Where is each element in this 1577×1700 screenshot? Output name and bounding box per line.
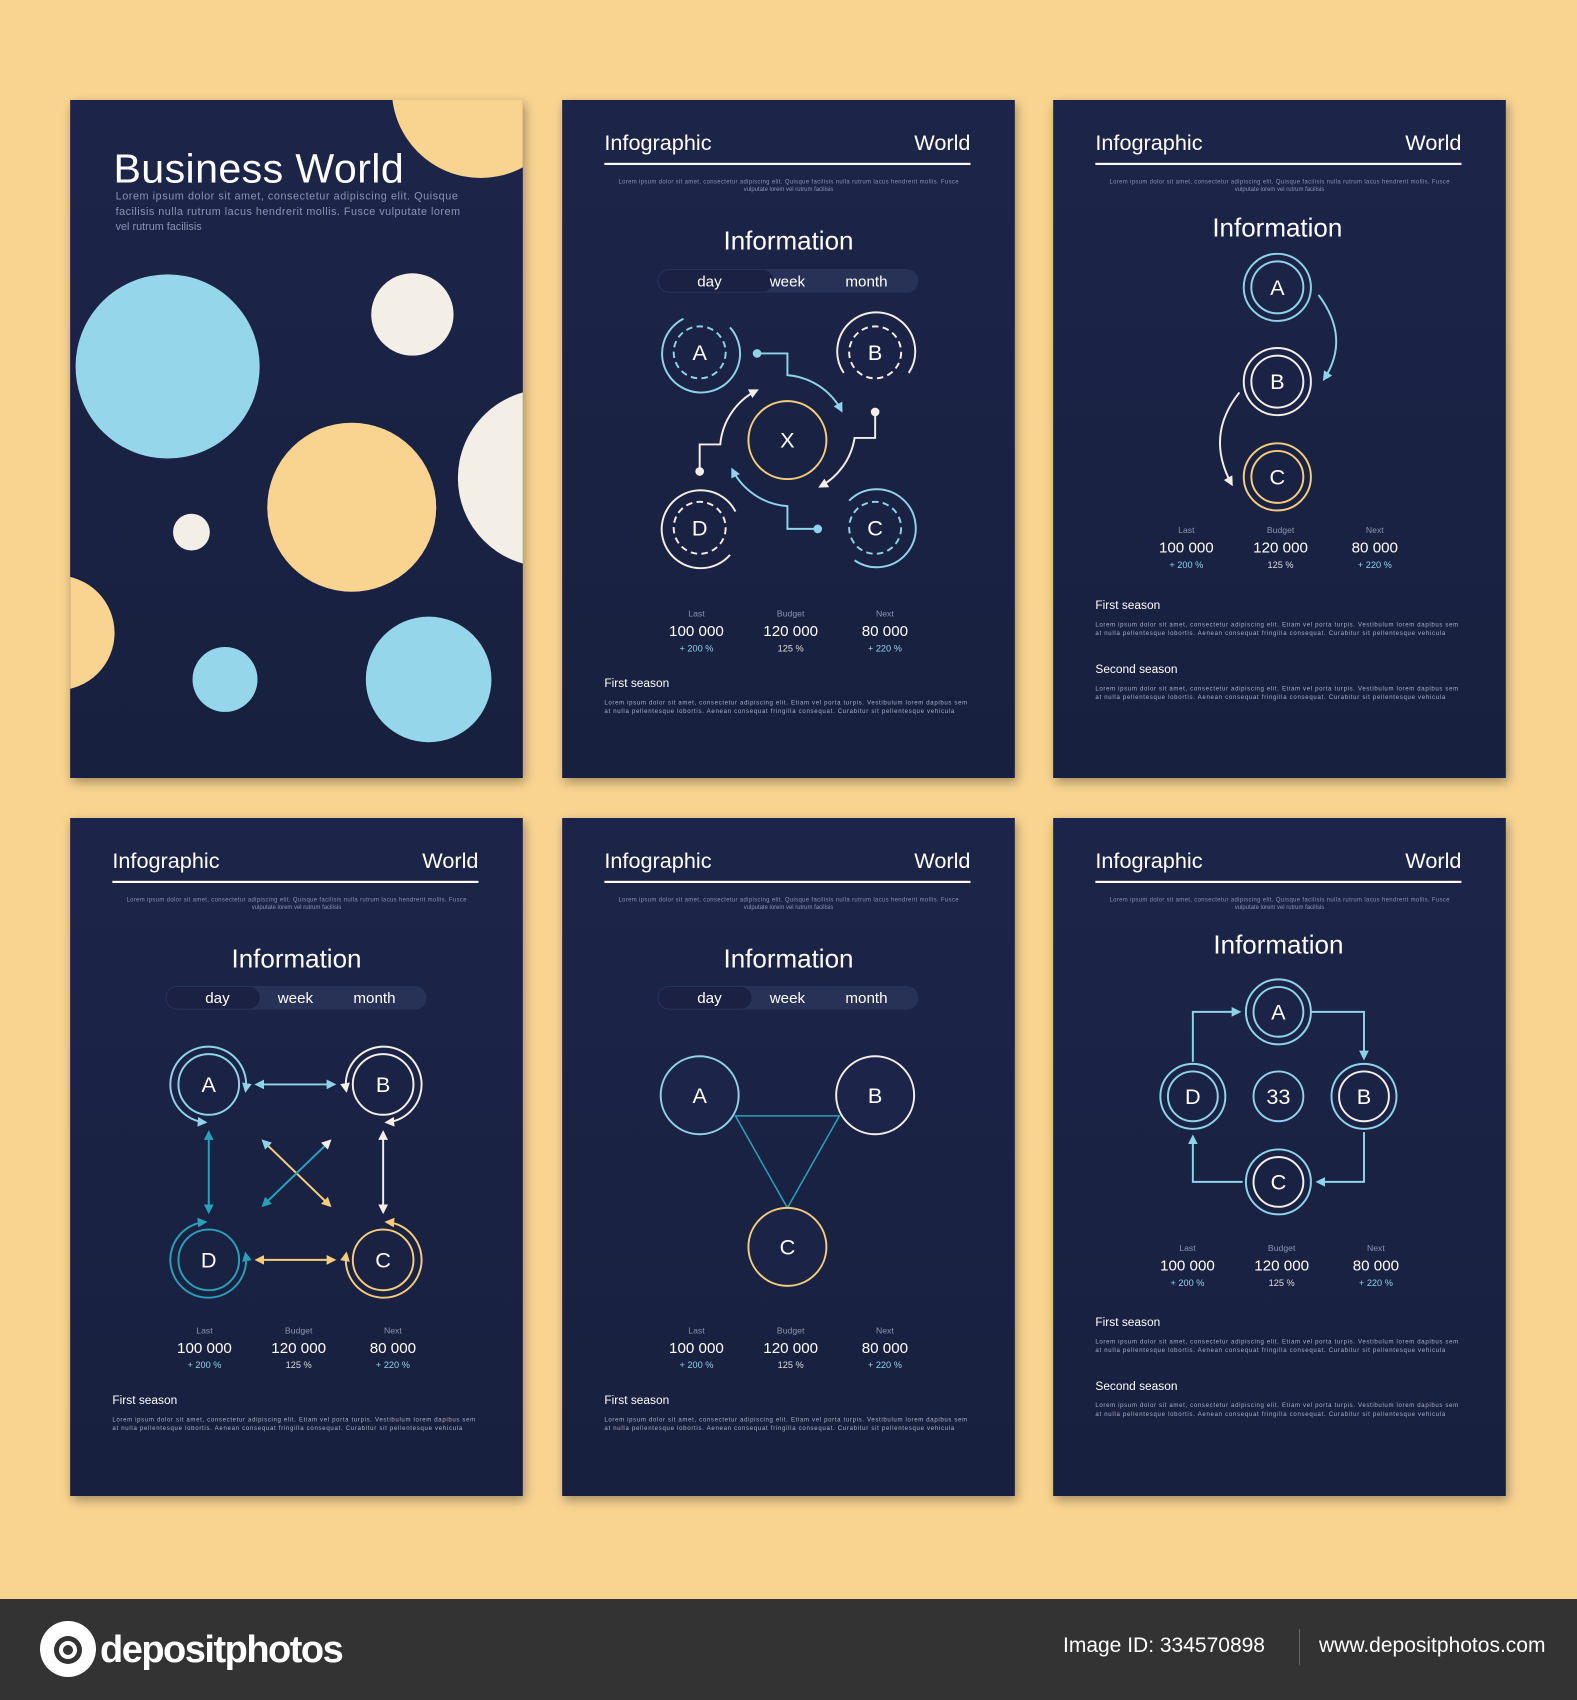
heading: Information xyxy=(232,943,362,973)
stats: Budget xyxy=(777,609,805,619)
diagram xyxy=(1220,254,1336,510)
panel: infographic X cycle: A xyxy=(692,340,707,365)
stats: + 220 % xyxy=(1359,1278,1393,1288)
header: World xyxy=(914,848,970,873)
panel: ABCD cycle 33: C xyxy=(1271,1169,1286,1194)
heading: Information xyxy=(724,943,854,973)
panel: vertical ABC: vulputate lorem vel rutrum facilisis xyxy=(1235,187,1324,193)
seasons: at nulla pellentesque lobortis. Aenean consequat fringilla consequat. Curabitur sit pellentesque vehicula xyxy=(1095,1348,1446,1354)
stats: Last xyxy=(196,1326,213,1336)
seasons: First season xyxy=(1095,598,1160,612)
panel: ABCD arrows: D xyxy=(201,1247,217,1272)
stats: 80 000 xyxy=(1353,1258,1399,1275)
tabs: month xyxy=(353,990,396,1007)
tabs: month xyxy=(845,990,888,1007)
stats: + 220 % xyxy=(376,1360,410,1370)
stats: Next xyxy=(384,1326,402,1336)
stats xyxy=(177,1326,416,1370)
header: World xyxy=(422,848,478,873)
tabs xyxy=(657,986,918,1010)
stats: Last xyxy=(688,1326,705,1336)
title: Business World xyxy=(113,145,404,191)
stats: 100 000 xyxy=(669,623,724,640)
seasons: at nulla pellentesque lobortis. Aenean consequat fringilla consequat. Curabitur sit pellentesque vehicula xyxy=(1095,695,1446,701)
icon: camera xyxy=(40,1621,96,1677)
logo xyxy=(40,1621,343,1677)
stats: + 200 % xyxy=(679,1360,713,1370)
stats: + 200 % xyxy=(1170,1278,1204,1288)
stats: 125 % xyxy=(778,643,804,653)
stats: 125 % xyxy=(1269,1278,1295,1288)
panel: vertical ABC: A xyxy=(1270,275,1285,300)
stats: 125 % xyxy=(286,1360,312,1370)
stats: Next xyxy=(1367,1243,1385,1253)
seasons xyxy=(1095,1315,1458,1418)
stats: Next xyxy=(1366,525,1384,535)
stats: 80 000 xyxy=(370,1340,416,1357)
stats xyxy=(1159,525,1398,570)
header xyxy=(1095,848,1461,883)
stats: 80 000 xyxy=(862,1340,908,1357)
first season xyxy=(604,676,967,715)
stats xyxy=(669,1326,908,1370)
panel: triangle ABC xyxy=(562,818,1015,1496)
panel: triangle ABC: C xyxy=(780,1234,795,1259)
panel: infographic X cycle xyxy=(562,100,1015,778)
panel: ABCD arrows: C xyxy=(375,1247,391,1272)
seasons: at nulla pellentesque lobortis. Aenean consequat fringilla consequat. Curabitur sit pellentesque vehicula xyxy=(1095,631,1446,637)
logo: depositphotos xyxy=(100,1629,343,1671)
first season: Lorem ipsum dolor sit amet, consectetur adipiscing elit. Etiam vel porta turpis. Vestibulum lorem dapibus sem xyxy=(604,700,967,706)
tabs xyxy=(657,269,918,293)
stats: + 220 % xyxy=(868,643,902,653)
first season: at nulla pellentesque lobortis. Aenean consequat fringilla consequat. Curabitur sit pellentesque vehicula xyxy=(604,709,955,715)
panel: ABCD cycle 33: B xyxy=(1357,1084,1371,1109)
heading: Information xyxy=(1212,212,1342,242)
stats: 100 000 xyxy=(1159,540,1214,557)
heading: Information xyxy=(724,225,854,255)
diagram xyxy=(1160,979,1396,1214)
stats xyxy=(669,609,908,653)
header: Infographic xyxy=(1095,848,1203,873)
tabs: day xyxy=(697,273,722,290)
heading: Information xyxy=(1213,929,1343,959)
stats: 100 000 xyxy=(177,1340,232,1357)
stats: 125 % xyxy=(1268,560,1294,570)
seasons: Lorem ipsum dolor sit amet, consectetur adipiscing elit. Etiam vel porta turpis. Vestibulum lorem dapibus sem xyxy=(1095,686,1458,692)
footer bar xyxy=(0,1599,1577,1700)
stats: Last xyxy=(688,609,705,619)
tabs: week xyxy=(769,990,806,1007)
panel: triangle ABC: Lorem ipsum dolor sit amet, consectetur adipiscing elit. Quisque facilisis nulla rutrum lacus hendrerit mollis. Fusce xyxy=(618,897,959,903)
stats: 80 000 xyxy=(862,623,908,640)
header: World xyxy=(1405,130,1461,155)
stats: 120 000 xyxy=(1253,540,1308,557)
stats: Budget xyxy=(285,1326,313,1336)
tabs: week xyxy=(769,273,806,290)
seasons: Lorem ipsum dolor sit amet, consectetur adipiscing elit. Etiam vel porta turpis. Vestibulum lorem dapibus sem xyxy=(1095,622,1458,628)
stats xyxy=(1160,1243,1399,1288)
panel: triangle ABC: A xyxy=(692,1083,707,1108)
first season: First season xyxy=(112,1393,177,1407)
seasons: Second season xyxy=(1095,662,1177,676)
panel: ABCD cycle 33: A xyxy=(1271,999,1286,1024)
header xyxy=(112,848,478,883)
first season: First season xyxy=(604,676,669,690)
text block xyxy=(116,191,460,233)
panel: triangle ABC: B xyxy=(868,1083,882,1108)
panel: ABCD cycle 33: vulputate lorem vel rutrum facilisis xyxy=(1235,905,1324,911)
tabs: week xyxy=(277,990,314,1007)
panel: infographic X cycle: B xyxy=(868,340,882,365)
tabs xyxy=(165,986,426,1010)
first season xyxy=(604,1393,967,1432)
diagram xyxy=(170,1047,422,1298)
stats: + 200 % xyxy=(187,1360,221,1370)
seasons: First season xyxy=(1095,1315,1160,1329)
first season xyxy=(112,1393,475,1432)
stats: + 200 % xyxy=(679,643,713,653)
panel: vertical ABC xyxy=(1053,100,1506,778)
text block: facilisis nulla rutrum lacus hendrerit mollis. Fusce vulputate lorem xyxy=(116,206,460,218)
panel: infographic X cycle: X xyxy=(780,428,795,453)
stats: 120 000 xyxy=(763,1340,818,1357)
text block: Lorem ipsum dolor sit amet, consectetur adipiscing elit. Quisque xyxy=(116,191,458,203)
first season: at nulla pellentesque lobortis. Aenean consequat fringilla consequat. Curabitur sit pellentesque vehicula xyxy=(604,1426,955,1432)
diagram xyxy=(661,1056,914,1286)
stats: Budget xyxy=(1267,525,1295,535)
panel: ABCD arrows: B xyxy=(376,1072,390,1097)
stats: Last xyxy=(1178,525,1195,535)
seasons: Second season xyxy=(1095,1379,1177,1393)
panel: infographic X cycle: D xyxy=(692,515,708,540)
url: www.depositphotos.com xyxy=(1319,1634,1545,1657)
stats: 120 000 xyxy=(271,1340,326,1357)
seasons xyxy=(1095,598,1458,701)
stats: Budget xyxy=(777,1326,805,1336)
stats: 100 000 xyxy=(669,1340,724,1357)
panel: infographic X cycle: Lorem ipsum dolor sit amet, consectetur adipiscing elit. Quisque facilisis nulla rutrum lacus hendrerit mollis. Fusce xyxy=(618,179,959,185)
first season: Lorem ipsum dolor sit amet, consectetur adipiscing elit. Etiam vel porta turpis. Vestibulum lorem dapibus sem xyxy=(112,1417,475,1423)
stats: Budget xyxy=(1268,1243,1296,1253)
seasons: at nulla pellentesque lobortis. Aenean consequat fringilla consequat. Curabitur sit pellentesque vehicula xyxy=(1095,1412,1446,1418)
panel: vertical ABC: B xyxy=(1270,369,1285,394)
stats: Next xyxy=(876,609,894,619)
first season: Lorem ipsum dolor sit amet, consectetur adipiscing elit. Etiam vel porta turpis. Vestibulum lorem dapibus sem xyxy=(604,1417,967,1423)
first season: First season xyxy=(604,1393,669,1407)
panel: ABCD cycle 33: 33 xyxy=(1266,1084,1290,1109)
panel: ABCD cycle 33: D xyxy=(1185,1084,1201,1109)
diagram xyxy=(662,312,916,568)
stats: + 220 % xyxy=(1358,560,1392,570)
panel: ABCD arrows: A xyxy=(202,1072,217,1097)
tabs: day xyxy=(697,990,722,1007)
seasons: Lorem ipsum dolor sit amet, consectetur adipiscing elit. Etiam vel porta turpis. Vestibulum lorem dapibus sem xyxy=(1095,1339,1458,1345)
stats: 100 000 xyxy=(1160,1258,1215,1275)
stats: + 200 % xyxy=(1169,560,1203,570)
stats: 120 000 xyxy=(1254,1258,1309,1275)
panel: triangle ABC: vulputate lorem vel rutrum facilisis xyxy=(744,905,833,911)
stats: + 220 % xyxy=(868,1360,902,1370)
seasons: Lorem ipsum dolor sit amet, consectetur adipiscing elit. Etiam vel porta turpis. Vestibulum lorem dapibus sem xyxy=(1095,1403,1458,1409)
panel: infographic X cycle: vulputate lorem vel rutrum facilisis xyxy=(744,187,833,193)
first season: at nulla pellentesque lobortis. Aenean consequat fringilla consequat. Curabitur sit pellentesque vehicula xyxy=(112,1426,463,1432)
tabs: day xyxy=(205,990,230,1007)
panel: ABCD cycle 33 xyxy=(1053,818,1506,1496)
panel: ABCD arrows: Lorem ipsum dolor sit amet, consectetur adipiscing elit. Quisque facilisis nulla rutrum lacus hendrerit mollis. Fusce xyxy=(126,897,467,903)
header xyxy=(604,848,970,883)
panel: vertical ABC: C xyxy=(1270,464,1285,489)
panel: business world cover xyxy=(70,100,523,778)
stats: 80 000 xyxy=(1352,540,1398,557)
text block: vel rutrum facilisis xyxy=(116,221,202,233)
stats: 120 000 xyxy=(763,623,818,640)
image id: Image ID: 334570898 xyxy=(1063,1634,1265,1657)
panel: ABCD arrows xyxy=(70,818,523,1496)
header: Infographic xyxy=(112,848,220,873)
header: Infographic xyxy=(1095,130,1203,155)
header: Infographic xyxy=(604,130,712,155)
stats: Last xyxy=(1179,1243,1196,1253)
panel: vertical ABC: Lorem ipsum dolor sit amet, consectetur adipiscing elit. Quisque facilisis nulla rutrum lacus hendrerit mollis. Fusce xyxy=(1109,179,1450,185)
stats: Next xyxy=(876,1326,894,1336)
header xyxy=(1095,130,1461,165)
header xyxy=(604,130,970,165)
panel: infographic X cycle: C xyxy=(867,515,883,540)
stats: 125 % xyxy=(778,1360,804,1370)
header: World xyxy=(914,130,970,155)
panel: ABCD arrows: vulputate lorem vel rutrum facilisis xyxy=(252,905,341,911)
header: Infographic xyxy=(604,848,712,873)
tabs: month xyxy=(845,273,888,290)
header: World xyxy=(1405,848,1461,873)
panel: ABCD cycle 33: Lorem ipsum dolor sit amet, consectetur adipiscing elit. Quisque facilisis nulla rutrum lacus hendrerit mollis. Fusce xyxy=(1109,897,1450,903)
